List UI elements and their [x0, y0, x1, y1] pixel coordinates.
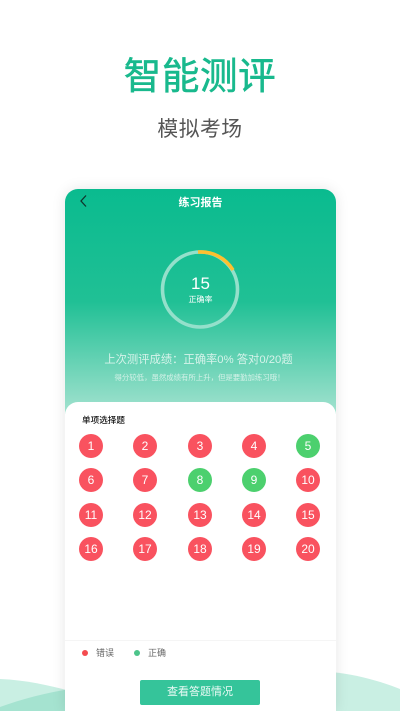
answer grid: 3	[197, 439, 203, 453]
answer grid: 17	[138, 542, 152, 556]
answer grid: 20	[301, 542, 315, 556]
answer grid: 19	[247, 542, 261, 556]
answer grid: 12	[138, 508, 152, 522]
ring label: 正确率	[188, 295, 212, 304]
answer grid: 11	[85, 508, 97, 522]
answer grid: 4	[251, 439, 257, 453]
answer grid: 1	[88, 439, 94, 453]
ring value: 15	[191, 274, 210, 293]
icon: back arrow	[80, 195, 86, 207]
button: view answers: 查看答题情况	[167, 686, 233, 698]
answer grid: 10	[301, 473, 315, 487]
chart: accuracy ring	[160, 250, 240, 329]
answer grid	[79, 434, 320, 561]
answer grid: 9	[251, 473, 257, 487]
last score text: 上次测评成绩：正确率0% 答对0/20题	[104, 354, 293, 366]
advice text: 得分较低，虽然成绩有所上升，但是要勤加练习哦！	[114, 373, 284, 382]
answer grid: 6	[88, 473, 94, 487]
answer grid: 15	[301, 508, 315, 522]
background waves	[0, 672, 400, 711]
answer grid: 8	[197, 473, 203, 487]
answer grid: 16	[84, 542, 98, 556]
button: view answers	[140, 680, 260, 705]
section heading: 单项选择题	[82, 415, 125, 425]
legend	[82, 648, 166, 658]
panel: answer sheet	[65, 402, 336, 711]
subtitle: 模拟考场	[157, 118, 243, 141]
panel: phone card	[65, 189, 336, 711]
answer grid: 14	[247, 508, 261, 522]
legend: 正确	[148, 648, 166, 658]
answer grid: 2	[142, 439, 148, 453]
answer grid: 5	[305, 439, 311, 453]
title: 智能测评	[124, 55, 276, 97]
answer grid: 7	[142, 473, 148, 487]
header title: 练习报告	[178, 197, 222, 209]
legend: 错误	[96, 648, 114, 658]
answer grid: 18	[193, 542, 207, 556]
panel: green report header	[65, 189, 336, 414]
answer grid: 13	[193, 508, 207, 522]
